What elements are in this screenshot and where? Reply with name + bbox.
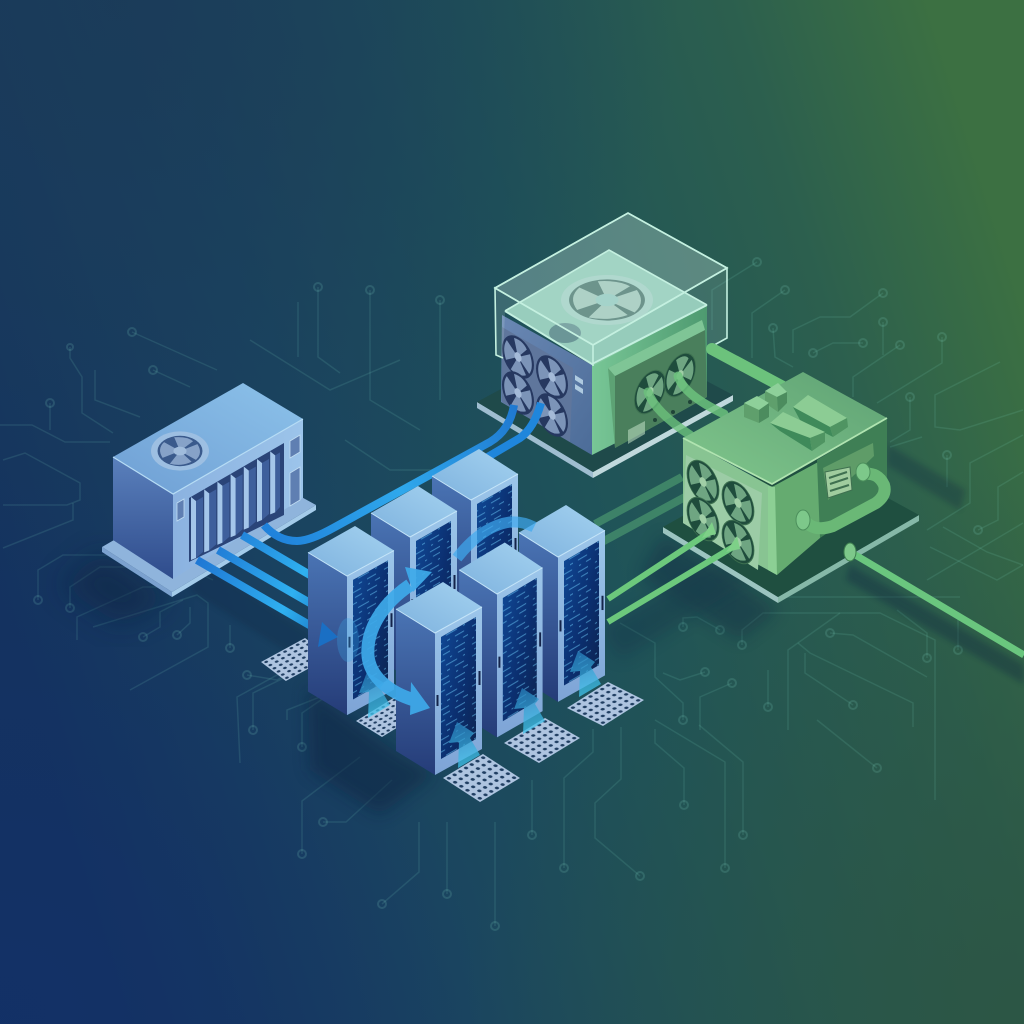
server front [396,582,482,775]
chiller right face [592,305,707,455]
cast shadows [60,445,1024,815]
chiller base plate [477,330,733,478]
circuit board traces [0,262,1023,926]
tile under second row server [356,697,421,737]
green lines to servers [608,522,740,622]
pipe flange [796,463,870,530]
curved airflow arrow over racks [368,567,432,715]
tile under first server [261,638,330,681]
straight line one [242,535,310,575]
perforated floor tiles [261,638,644,802]
green outlet pipe [844,543,1024,655]
condenser fins [189,443,284,562]
line to first chiller fan [264,405,514,541]
green unit U pipe [806,474,885,528]
server left [308,526,394,715]
cube front [744,396,769,423]
line to second chiller fan [486,403,541,458]
line arrowheads [702,522,740,552]
chiller fan panel [502,327,583,443]
server right [519,505,605,702]
server racks [308,449,605,775]
green unit base plate [663,450,919,603]
green unit top hardware: cubes and bars [744,383,848,451]
chiller knob [549,323,581,343]
server back middle [371,486,457,679]
straight line three [197,560,325,634]
tile right [567,682,644,726]
left cooling unit [102,383,316,597]
blue arrowhead into first server [318,618,359,662]
unit top face [113,383,303,494]
unit right face [173,419,303,579]
green unit right face light section [772,461,820,575]
side vents [177,435,300,521]
chiller left face [501,315,592,455]
upward airflow arrows [359,651,601,768]
chiller top fan [561,275,653,325]
straight line two [218,550,310,603]
green unit gauge plate [823,443,874,500]
green unit front chamfer [768,486,777,575]
chiller top face [505,250,707,363]
bar back [793,395,848,437]
unit left face [113,457,173,579]
green coolant lines between servers and units, background [595,477,685,542]
tile middle [504,718,580,763]
curved airflow ribbon between back racks [457,522,534,558]
server back right [432,449,518,642]
green unit left face [683,438,777,575]
top fan [151,431,209,471]
green unit fan panel [683,454,762,570]
green unit rear right panel [817,418,887,538]
outlet flange [844,543,856,561]
central chiller on base [477,213,733,478]
circuit board nodes [34,258,982,930]
green unit top face [683,372,887,484]
green cooling unit [663,372,919,603]
unit base plate [102,465,316,597]
cube back [765,383,787,412]
bar front [770,412,825,451]
tile front [443,754,520,802]
green tubes between chiller and green unit [648,349,785,435]
transparent cover [495,213,727,366]
blue coolant lines from unit to servers [197,403,541,634]
chiller green side panel [608,320,707,448]
server center [459,542,543,737]
